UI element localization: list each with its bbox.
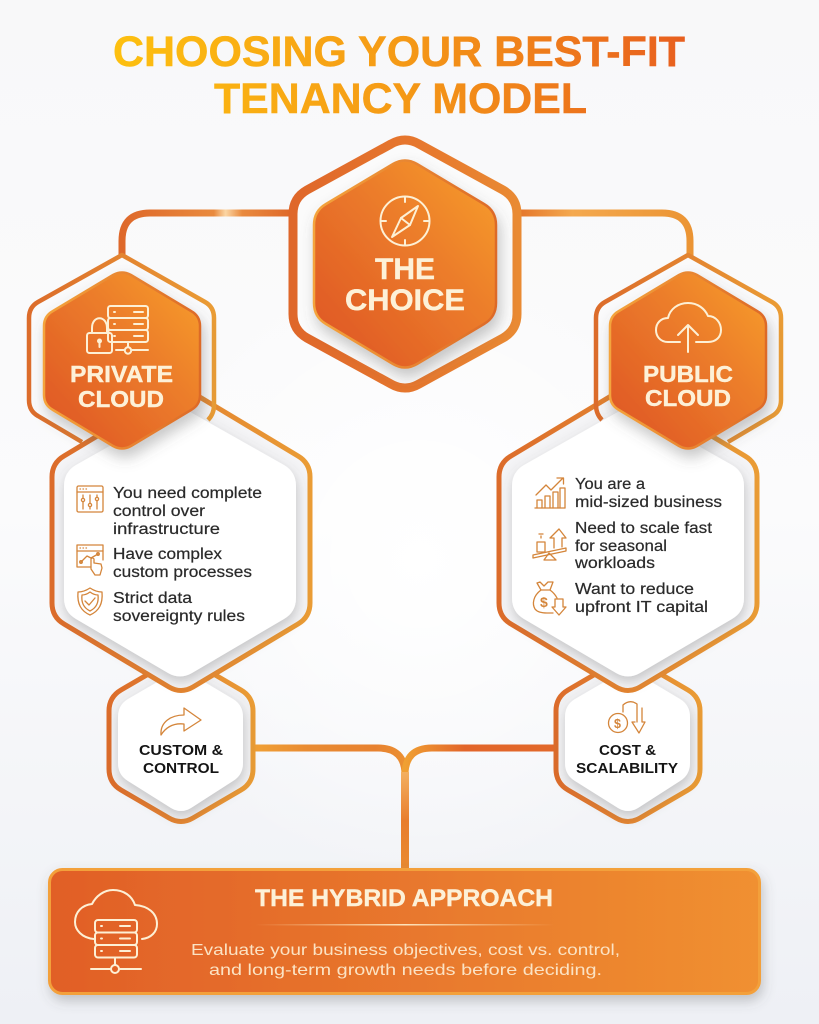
text: data sovereignty	[113, 590, 245, 625]
text: custom processes: Have complex	[113, 546, 222, 563]
large hexagon ring	[499, 390, 757, 690]
icon: balance with arrow	[533, 529, 566, 560]
connector: choice to public cloud	[518, 213, 690, 256]
title: TENANCY MODEL	[214, 75, 587, 123]
text: mid-sized business: You are a	[575, 476, 645, 493]
panel: the choice hexagon	[293, 140, 517, 388]
icon: money bag with down arrow	[533, 582, 566, 615]
label: cost and scalability	[576, 743, 678, 777]
icon: curved arrow	[161, 708, 201, 735]
heading: PRIVATE	[70, 361, 173, 387]
label: cost and scalability: SCALABILITY	[576, 761, 678, 777]
label: custom and control	[139, 743, 224, 777]
small hexagon ring	[109, 658, 253, 822]
heading: CLOUD	[645, 385, 731, 411]
icon: cloud upload	[656, 303, 721, 352]
text: complete control: control over	[113, 503, 205, 520]
text: custom processes	[113, 546, 252, 581]
description: and long-term growth needs before deciding.	[209, 962, 602, 979]
icon: lock and server	[87, 306, 148, 354]
connector: cost and scalability to hybrid	[405, 748, 556, 870]
text: complete control: You need complete	[113, 485, 262, 502]
small hexagon: custom and control	[118, 671, 243, 811]
panel: public cloud	[499, 255, 781, 822]
outer ring of header	[596, 255, 781, 442]
text: seasonal workloads	[574, 520, 713, 572]
heading: THE	[375, 253, 435, 286]
connector: vertical stem	[401, 772, 409, 870]
banner	[50, 870, 760, 994]
small hexagon ring	[556, 658, 700, 822]
text: reduce capital	[575, 581, 708, 616]
icon: coin and arrows: $	[614, 717, 621, 731]
icon: shield	[78, 588, 102, 615]
text: custom processes: custom processes	[113, 564, 252, 581]
text: data sovereignty: Strict data	[113, 590, 192, 607]
list card	[64, 410, 296, 676]
text: complete control: infrastructure	[113, 521, 220, 538]
text: reduce capital: upfront IT capital	[575, 599, 708, 616]
heading	[345, 253, 465, 317]
connector: custom and control to hybrid	[252, 748, 405, 870]
large hexagon ring	[52, 390, 310, 690]
label: cost and scalability: COST &	[599, 743, 657, 759]
description: Evaluate your business objectives, cost vs. control,	[191, 942, 620, 959]
header hexagon	[610, 272, 766, 448]
icon: coin and arrows	[608, 702, 645, 733]
text: seasonal workloads: Need to scale fast	[575, 520, 713, 537]
heading: THE HYBRID APPROACH	[255, 885, 553, 912]
text: seasonal workloads: workloads	[574, 555, 655, 572]
icon: money bag with down arrow: $	[540, 594, 548, 610]
heading: CLOUD	[78, 386, 164, 412]
heading	[643, 361, 733, 411]
connector: choice to private cloud	[122, 213, 292, 256]
outer ring of header	[29, 255, 214, 442]
icon: process window with hand	[77, 545, 103, 575]
text: complete control	[113, 485, 262, 538]
panel: private cloud	[29, 255, 310, 822]
heading: PUBLIC	[643, 361, 733, 387]
icon: compass	[380, 196, 430, 246]
panel: the hybrid approach	[50, 870, 760, 994]
icon: cloud server	[75, 890, 157, 973]
text: seasonal workloads: for seasonal	[575, 538, 667, 555]
text: mid-sized business: mid-sized business	[575, 494, 722, 511]
text: mid-sized business	[575, 476, 722, 511]
heading: CHOICE	[345, 284, 465, 317]
text: reduce capital: Want to reduce	[575, 581, 694, 598]
heading	[70, 361, 173, 412]
title	[113, 28, 685, 123]
outer ring	[293, 140, 517, 388]
list card	[512, 410, 744, 676]
icon: sliders window	[77, 486, 103, 512]
label: custom and control: CUSTOM &	[139, 743, 224, 759]
description	[191, 942, 620, 979]
icon: growth chart	[535, 478, 565, 508]
header hexagon	[44, 272, 200, 448]
label: custom and control: CONTROL	[143, 761, 219, 777]
divider	[255, 924, 555, 926]
small hexagon: cost and scalability	[565, 671, 690, 811]
inner hexagon	[314, 160, 496, 368]
title: CHOOSING YOUR BEST-FIT	[113, 28, 685, 76]
text: data sovereignty: sovereignty rules	[113, 608, 245, 625]
